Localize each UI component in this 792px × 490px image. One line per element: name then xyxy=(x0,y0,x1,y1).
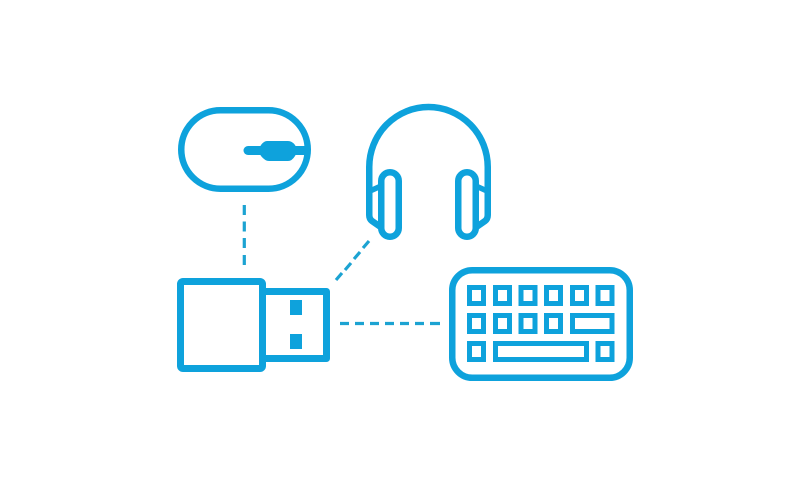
icon: headphones xyxy=(369,107,488,237)
icon: mouse xyxy=(181,110,308,189)
connector: headphones to USB xyxy=(336,241,369,280)
connector: mouse to USB xyxy=(243,205,246,265)
connector: USB to keyboard xyxy=(340,322,440,325)
icon: USB receiver xyxy=(180,282,326,368)
icon: keyboard xyxy=(452,270,630,378)
